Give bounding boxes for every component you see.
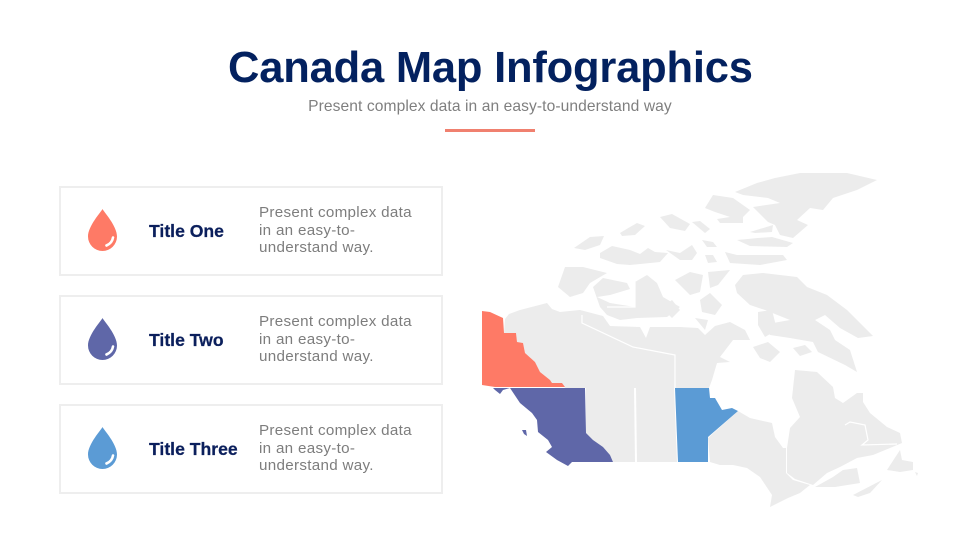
heading: title one: Title One bbox=[149, 221, 224, 241]
province: British Columbia bbox=[493, 388, 613, 466]
icon: indigo drop bbox=[88, 318, 117, 360]
text: description three: in an easy-to- bbox=[259, 440, 355, 456]
text: description three bbox=[259, 422, 412, 474]
icon: coral drop bbox=[88, 209, 117, 251]
text: description one: in an easy-to- bbox=[259, 222, 355, 238]
subtitle: Present complex data in an easy-to-understand way bbox=[308, 98, 672, 115]
territory borders bbox=[582, 282, 897, 445]
icon: blue drop bbox=[88, 427, 117, 469]
text: description one bbox=[259, 204, 412, 256]
text: description one: Present complex data bbox=[259, 204, 412, 221]
panel: title one bbox=[59, 186, 443, 276]
province: Ontario bbox=[708, 411, 810, 507]
province: Yukon bbox=[482, 311, 565, 387]
panel: title two bbox=[59, 295, 443, 385]
province: Quebec and Labrador bbox=[787, 370, 902, 485]
text: description three: Present complex data bbox=[259, 422, 412, 439]
province: Saskatchewan bbox=[636, 388, 677, 462]
province: Newfoundland bbox=[887, 450, 918, 476]
province: Alberta bbox=[586, 388, 635, 462]
northern territories and islands bbox=[504, 173, 877, 388]
text: description two bbox=[259, 313, 412, 365]
panel: title three bbox=[59, 404, 443, 494]
heading: title three: Title Three bbox=[149, 439, 238, 459]
text: description one: understand way. bbox=[259, 239, 374, 256]
text: description two: in an easy-to- bbox=[259, 330, 355, 348]
accent underline bbox=[445, 129, 535, 132]
province: Manitoba bbox=[675, 388, 738, 462]
text: description three: understand way. bbox=[259, 457, 374, 474]
text: description two: Present complex data bbox=[259, 313, 412, 330]
text: description two: understand way. bbox=[259, 348, 374, 365]
province: Maritimes bbox=[815, 468, 882, 497]
heading: title two: Title Two bbox=[149, 330, 224, 350]
title: Canada Map Infographics bbox=[228, 44, 753, 92]
